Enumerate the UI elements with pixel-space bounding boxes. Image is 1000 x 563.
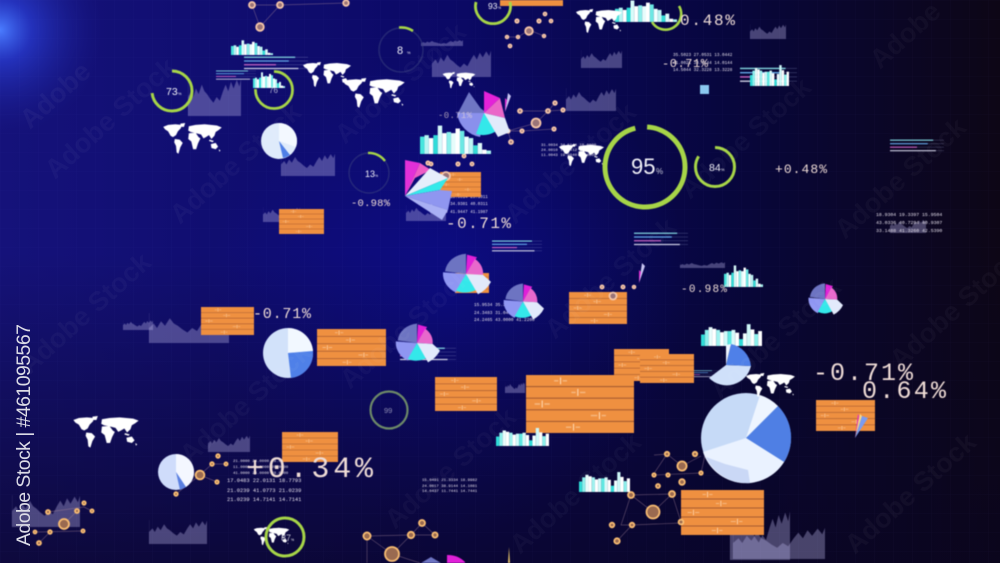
network: bottom centre	[363, 520, 438, 563]
label: -0.71% left: -0.71%	[253, 306, 312, 323]
ring: 76%	[256, 72, 292, 108]
fan chart: bottom	[421, 555, 465, 563]
half pie chart	[709, 344, 751, 385]
label: -0.71% top right: -0.71%	[662, 57, 709, 71]
label: -0.71% faint: -0.71%	[438, 111, 473, 121]
label: +0.34%: +0.34%	[246, 453, 374, 487]
ring: 93%: 93	[488, 1, 498, 11]
pie chart: small top	[261, 123, 297, 159]
ring: 73%: 73	[166, 86, 178, 98]
data rows: 24.2465 43.0000 41.2200	[474, 318, 535, 323]
network: beside pie	[174, 454, 228, 496]
label: -0.71% large: -0.71%	[813, 359, 914, 388]
data rows: 24.0010 14.1412 14.8811	[541, 149, 597, 153]
data rows: 15.9534 35.3218 18.0000	[474, 303, 535, 308]
fan chart: large	[405, 160, 452, 220]
data rows: 21.0439 41.9447 41.1987	[430, 211, 488, 215]
small spikes	[505, 93, 868, 563]
data rows: 35.5023 27.0531 13.0442	[673, 53, 733, 58]
network: mid dots	[426, 154, 635, 300]
watermarks: Adobe Stock	[839, 426, 982, 559]
fan chart: top centre	[457, 91, 510, 137]
watermarks: Adobe Stock	[539, 211, 682, 344]
fan chart: lower centre	[396, 324, 440, 362]
data rows: 41.0021 38.1144 14.0144	[673, 61, 733, 66]
watermarks: Adobe Stock	[164, 96, 307, 229]
data rows: 31.0034 34.5144 18.0000	[541, 144, 597, 148]
label: -0.71% centre: -0.71%	[446, 215, 511, 233]
ring: 95%: %	[656, 167, 663, 176]
ring: top right	[652, 6, 681, 30]
network: bottom right	[610, 452, 705, 544]
data rows: 21.0239 41.0773 21.0239	[227, 488, 301, 494]
ring: 99%: 99	[384, 406, 392, 415]
pie chart: medium	[263, 328, 313, 378]
bar charts	[231, 0, 789, 492]
ring: 73%	[152, 71, 192, 111]
data rows: 33.1488 41.3260 42.5390	[876, 228, 942, 234]
watermarks: Adobe Stock	[39, 51, 182, 184]
watermarks: Adobe Stock	[704, 271, 847, 404]
ring: 93%	[476, 1, 510, 24]
watermarks: Adobe Stock	[499, 96, 642, 229]
ring: 84%: 84	[709, 162, 721, 174]
world maps	[73, 9, 795, 545]
watermarks: Adobe Stock	[334, 261, 477, 394]
network: top	[249, 0, 349, 31]
data rows: 14.5044 32.3228 13.3228	[673, 68, 733, 73]
data rows: 11.0043 19.9040 21.0000	[541, 154, 597, 158]
label: 0.64%: 0.64%	[862, 377, 947, 406]
ring: 13%	[349, 153, 389, 193]
ring: 95%: 95	[631, 154, 655, 179]
ring: 87%: %	[291, 538, 294, 542]
side credit: Adobe Stock | #461095567	[13, 324, 35, 546]
ring: 13%: 13	[365, 169, 375, 179]
watermarks: Adobe Stock	[379, 401, 522, 534]
data rows: 18.9304 19.3397 15.9504	[876, 212, 942, 218]
label: -0.98%: -0.98%	[351, 198, 391, 210]
ring: 8%	[379, 27, 423, 72]
ring: 84%	[696, 148, 734, 186]
watermarks: Adobe Stock	[329, 16, 472, 149]
data rows: 41.0000 24.0000 38.0000	[233, 472, 289, 476]
ring: 87%	[266, 518, 304, 556]
pie chart: large	[701, 393, 791, 483]
watermarks: Adobe	[14, 56, 96, 134]
data rows: 21.0000 24.0000 18.0000	[233, 460, 289, 464]
ring: 73%: %	[178, 91, 182, 96]
data rows	[227, 53, 942, 503]
data rows: 21.0239 14.7141 14.7141	[227, 497, 301, 503]
watermarks: Adobe Stock	[504, 426, 647, 559]
data rows: 43.0336 40.7294 40.9307	[876, 220, 942, 226]
label: 0.48% top: 0.48%	[680, 12, 735, 30]
data rows: 24.0017 38.9144 14.1081	[422, 485, 478, 489]
data rows: 24.3483 31.0419 16.2000	[474, 311, 535, 316]
data rows: 14.0437 11.7441 14.7441	[422, 490, 478, 494]
data rows: 15.0491 21.3334 18.9982	[422, 479, 478, 483]
pie chart: lower left	[158, 454, 194, 490]
ring: 13%: %	[375, 174, 378, 178]
ring: 93%: %	[498, 6, 501, 10]
ring: 8%: 8	[397, 45, 403, 57]
orange data tables	[201, 0, 875, 535]
label: +0.48%: +0.48%	[775, 162, 827, 177]
watermarks: Adobe Stock	[829, 111, 972, 244]
ring: 99%	[370, 392, 408, 428]
horizontal line charts	[216, 57, 944, 377]
ring: 8%: %	[407, 50, 411, 55]
watermarks: Adobe Stock	[14, 246, 157, 379]
fan chart: centre	[443, 254, 491, 294]
watermarks: Adobe Stock	[174, 336, 317, 469]
ring: 76%: 76	[269, 86, 278, 95]
data rows: 21.0034 18.0014 25.1011	[430, 196, 488, 200]
network: top centre	[506, 12, 552, 48]
data rows: 11.0000 14.0000 28.0000	[233, 466, 289, 470]
fan chart: right	[808, 283, 843, 315]
watermarks: Adobe Stock	[674, 71, 817, 204]
ring: 95%	[603, 125, 687, 209]
network: left bottom	[34, 501, 94, 545]
network: upper middle	[506, 101, 565, 144]
fan chart: centre right	[504, 284, 544, 319]
ring: 84%: %	[721, 167, 725, 172]
data rows: 17.0483 22.0131 18.7793	[227, 478, 301, 484]
label: -0.98% right: -0.98%	[681, 284, 727, 296]
data rows: 21.7384 34.9381 40.0311	[430, 203, 488, 207]
ring: 87%: 87	[281, 533, 291, 543]
